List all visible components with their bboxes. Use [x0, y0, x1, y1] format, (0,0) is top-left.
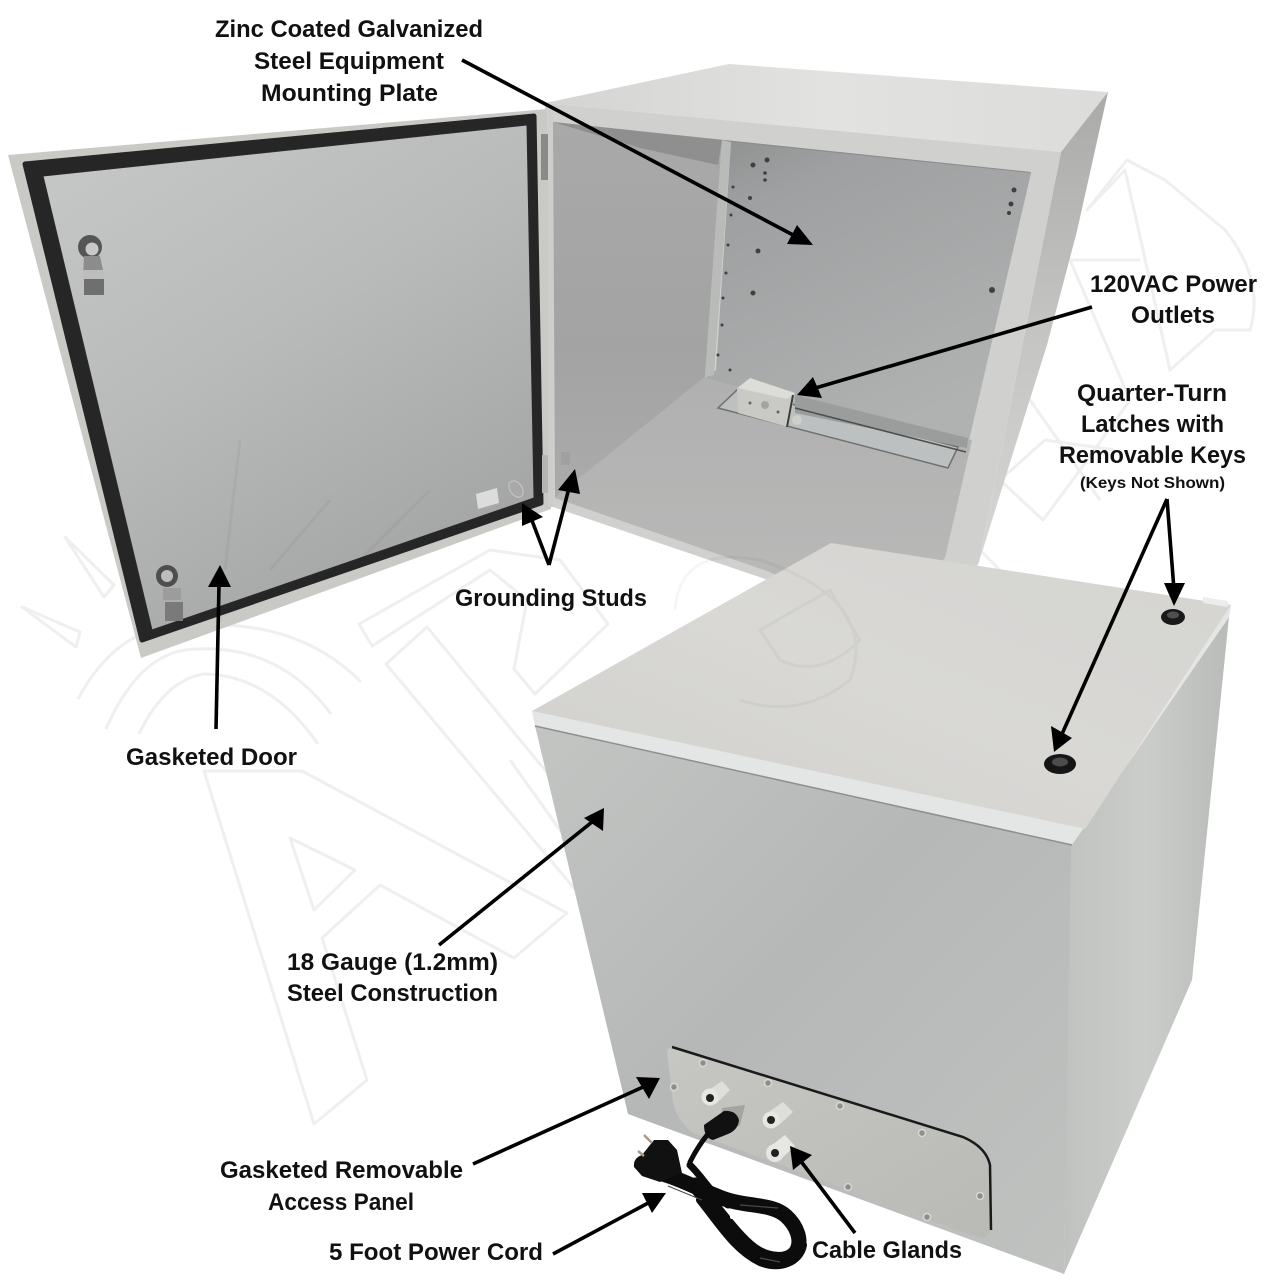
corner sticker — [1203, 597, 1228, 607]
arrows: latches — [1051, 499, 1185, 752]
arrow: steel construction — [439, 808, 604, 945]
arrow: power outlets — [797, 307, 1092, 398]
label: latches: Removable Keys — [1059, 442, 1246, 469]
cord bundle — [655, 1172, 799, 1259]
lower latch — [156, 565, 183, 621]
watermark on door — [225, 440, 430, 570]
latch far — [1161, 609, 1185, 625]
arrow: cable glands — [790, 1146, 855, 1233]
latch near — [1044, 754, 1076, 774]
label: power cord: 5 Foot Power Cord — [329, 1239, 543, 1266]
open door — [8, 109, 551, 658]
arrows: grounding studs — [522, 469, 580, 565]
watermark logo — [22, 160, 1254, 1124]
label: mounting plate — [215, 16, 483, 107]
cable gland 3 — [766, 1135, 795, 1162]
label: mounting plate: Zinc Coated Galvanized — [215, 16, 483, 43]
door inner panel — [43, 125, 534, 630]
right face — [1064, 617, 1229, 1274]
label: cable glands: Cable Glands — [812, 1237, 962, 1264]
hinges — [541, 110, 570, 507]
cord plug end at enclosure — [704, 1111, 739, 1140]
plate flange — [705, 140, 731, 377]
door grounding stud — [506, 478, 526, 500]
cable gland 1 — [702, 1081, 730, 1106]
din rail — [795, 395, 968, 448]
top surface — [545, 64, 1108, 152]
label: latches: Latches with — [1081, 411, 1224, 438]
interior ceiling — [553, 122, 1031, 176]
upper enclosure: open cabinet body — [545, 64, 1108, 640]
power cord — [634, 1105, 803, 1265]
cable gland 2 — [762, 1102, 793, 1128]
arrow: gasketed door — [208, 565, 231, 729]
label: mounting plate: Mounting Plate — [261, 80, 438, 107]
label: access panel — [220, 1157, 463, 1216]
label: steel construction: Steel Construction — [287, 980, 498, 1007]
interior left wall — [553, 122, 722, 498]
upper latch — [78, 235, 104, 295]
label: grounding studs: Grounding Studs — [455, 585, 647, 612]
arrow: access panel — [473, 1077, 660, 1164]
label: power outlets — [1090, 271, 1257, 329]
label: steel construction: 18 Gauge (1.2mm) — [287, 949, 498, 976]
power outlets — [737, 378, 802, 427]
door outer edge — [8, 109, 551, 658]
interior floor — [555, 377, 972, 640]
mounting holes — [716, 158, 1016, 372]
label: power outlets: Outlets — [1131, 302, 1215, 329]
panel screws — [700, 1060, 706, 1066]
label: latches: (Keys Not Shown) — [1080, 475, 1225, 492]
lower enclosure: closed cabinet — [532, 543, 1231, 1274]
lid top — [532, 543, 1231, 829]
gasket — [25, 116, 541, 640]
floor access slot — [718, 390, 958, 468]
label: gasketed door: Gasketed Door — [126, 744, 297, 771]
label: latches — [1059, 380, 1246, 492]
arrow: power cord — [553, 1193, 666, 1254]
watermark over lid — [675, 557, 860, 707]
label: access panel: Access Panel — [268, 1189, 414, 1216]
access panel — [667, 1047, 991, 1238]
cord highlights — [732, 1217, 786, 1234]
cord shadow on panel — [722, 1105, 745, 1137]
label: latches: Quarter-Turn — [1077, 380, 1227, 407]
left face — [535, 726, 1072, 1274]
mounting plate — [705, 142, 1031, 445]
label: access panel: Gasketed Removable — [220, 1157, 463, 1184]
lid lip — [532, 605, 1231, 845]
grounded plug — [634, 1140, 682, 1182]
label: mounting plate: Steel Equipment — [254, 48, 444, 75]
door label sticker — [476, 488, 499, 509]
label: steel construction — [287, 949, 498, 1007]
label: power outlets: 120VAC Power — [1090, 271, 1257, 298]
arrow: mounting plate — [462, 60, 813, 245]
interior ceiling shadow — [553, 122, 722, 165]
right outer side — [979, 92, 1108, 562]
cord lead — [690, 1134, 708, 1162]
front frame — [545, 103, 1061, 640]
